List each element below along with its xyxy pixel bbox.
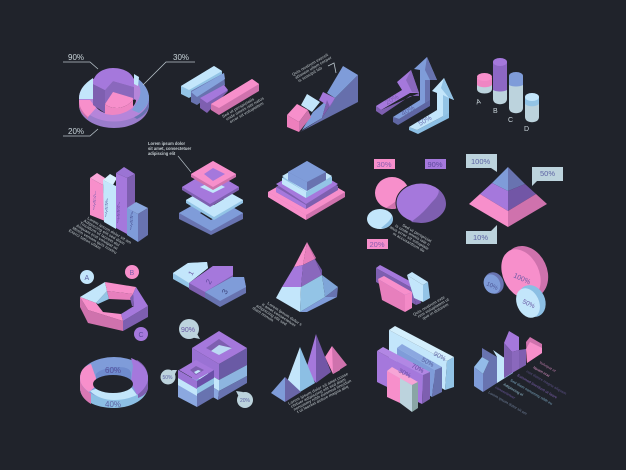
caption: unde omnis iste natus [225, 95, 265, 122]
coin 50%: 50% [521, 298, 536, 310]
legend lines: Lorem ipsum dolor sit am [488, 390, 528, 416]
caption: ationem ullam corpor [294, 55, 333, 80]
chart: three rising arrows [376, 57, 454, 134]
board 50%: 50% [420, 357, 435, 369]
pointer [178, 156, 191, 172]
caption: adipiscing elit sed [255, 303, 288, 327]
caption [252, 295, 304, 337]
top surface [80, 357, 148, 399]
caption: Quis nostrum exercit [291, 52, 330, 77]
caption [221, 92, 267, 126]
caption: is suscipit lab [297, 65, 323, 83]
arrow 50%: 50% [418, 115, 433, 128]
chart: stepped isometric bars [181, 66, 267, 126]
chart: tilted coins [481, 239, 556, 322]
legend lines: Volutpat ut [538, 360, 557, 374]
frame pink [191, 161, 236, 190]
caption: quo in dolorem [421, 302, 450, 321]
chart: numbered steps [173, 262, 246, 307]
bar 50%: 50% [129, 209, 133, 233]
chart: ring and pie [63, 53, 195, 136]
hole [96, 291, 134, 314]
bar 80%: 80% [104, 196, 108, 220]
caption: adipiscing elit [148, 151, 176, 156]
chart: mountain peaks [271, 334, 355, 416]
chart: faceted pyramid [252, 242, 338, 337]
label 30%: 30% [376, 160, 392, 169]
legend lines: Euismod tincidunt ut laore [516, 373, 558, 400]
legend lines: reet dolore magna aliquam [526, 369, 567, 396]
frame purple [182, 170, 239, 207]
legend lines: Iquam erat [532, 365, 551, 378]
caption: ctetuer adipiscing elit sed diam [290, 377, 347, 409]
bubble 50%: 50% [162, 375, 173, 381]
chart: hexagon ring [80, 265, 148, 341]
label 20%: 20% [370, 240, 385, 249]
caption: sit amet, consectetuer [148, 146, 192, 151]
label 90%: 90% [68, 53, 84, 62]
chart: isometric city columns [474, 331, 567, 416]
callout 10%: 10% [473, 233, 488, 242]
caption: Aliquam erat volutpat wi [75, 223, 119, 251]
caption: Adipiscing elit sed diam [83, 218, 126, 246]
chart: stacked square frames [148, 141, 243, 235]
caption: Minim veniam quis nostru [72, 225, 118, 255]
chart: layered platform pyramid [268, 161, 345, 220]
inner walls [96, 291, 109, 304]
frame light [186, 184, 243, 220]
caption: error sit voluptatem [229, 100, 265, 124]
label 90%: 90% [428, 160, 443, 169]
ring side [80, 297, 123, 331]
caption: atus error sit voluptate [389, 224, 430, 251]
bar 100%: 100% [116, 199, 120, 226]
chart: banded pyramid with labels [466, 154, 563, 244]
label 60%: 60% [105, 366, 121, 375]
label 30%: 30% [173, 53, 189, 62]
board 90%: 90% [432, 351, 447, 363]
caption: Lorem ipsum dolor sit amet conse [287, 371, 349, 406]
caption [412, 293, 452, 324]
caption [68, 211, 133, 262]
board light [407, 272, 430, 302]
badge C: C [138, 332, 144, 339]
caption: is unde omnis iste n [394, 223, 431, 247]
chart: cylinders A B C D [475, 58, 539, 133]
frame blue [179, 195, 243, 235]
chart: tilted boards with caption [376, 265, 452, 324]
legend lines: consectetuer [494, 385, 516, 400]
caption: t ut laoreet dolore magna aliq [296, 384, 350, 414]
cylinder D: D [524, 126, 529, 133]
chart: hollow cubes [160, 319, 253, 408]
caption: diam nonum [252, 305, 275, 323]
chart: ring with percentages [80, 357, 148, 409]
callout 50%: 50% [540, 169, 555, 178]
label 40%: 40% [105, 400, 121, 409]
blob 90% [396, 182, 446, 224]
pie slices [93, 68, 134, 115]
caption: Sed ut perspiciatis [221, 96, 256, 119]
board purple [376, 265, 421, 305]
hole [93, 375, 133, 393]
caption: Exerci tation ullam [68, 228, 102, 251]
coin 10%: 10% [485, 281, 499, 292]
callout 100%: 100% [471, 157, 491, 166]
chart: isometric column bars [68, 167, 148, 262]
cylinder B: B [493, 108, 498, 115]
large cube [192, 331, 247, 400]
pyramid faces [469, 167, 547, 227]
chart: bubble blobs [367, 159, 446, 255]
board 70%: 70% [410, 363, 425, 375]
caption: Sed ut perspiciat [402, 223, 433, 244]
badge A: A [84, 275, 90, 282]
arrow 40%: 40% [400, 105, 416, 118]
legend lines: Sed diam nonummy nibh eu [510, 378, 553, 406]
arrow 20%: 20% [384, 94, 400, 107]
blob 30% [375, 177, 409, 209]
chart: rising isometric mountain [287, 51, 358, 132]
badge B: B [130, 270, 134, 277]
caption: rem voluptatem ut [417, 296, 450, 319]
chart: layered percent boards [377, 326, 454, 412]
caption [291, 51, 335, 84]
bubble 90%: 90% [181, 327, 195, 334]
caption: it amet consectetuer [261, 302, 297, 328]
blob 20% [367, 209, 393, 229]
caption: m accusantium do [392, 231, 426, 253]
caption: Lorem ipsum dolor s [266, 301, 304, 327]
cylinder A: A [475, 98, 482, 106]
ring base [79, 74, 149, 128]
caption [387, 218, 434, 255]
top faces [80, 282, 148, 321]
caption: Tincidunt ut laoreet dol [79, 220, 121, 247]
pointer [328, 63, 336, 73]
caption: nonummy nibh euismod tincidun [292, 378, 352, 412]
caption [148, 141, 192, 156]
bubble 20%: 20% [240, 398, 251, 404]
caption: Quis nostrum exte [412, 294, 446, 317]
step 3: 3 [220, 287, 230, 296]
step 1: 1 [188, 270, 196, 277]
legend lines: Adipiscing el [502, 382, 524, 397]
board pink [378, 276, 412, 312]
board 30%: 30% [397, 368, 412, 380]
cylinder C: C [508, 117, 513, 124]
label 20%: 20% [68, 127, 84, 136]
legend lines [488, 360, 567, 416]
coin 100%: 100% [512, 272, 531, 286]
step 2: 2 [204, 277, 214, 286]
caption: Lorem ipsum dolor [148, 141, 185, 146]
bar 70%: 70% [92, 189, 96, 213]
small cube [178, 360, 214, 407]
caption: Lorem ipsum dolor sit am [86, 216, 133, 245]
